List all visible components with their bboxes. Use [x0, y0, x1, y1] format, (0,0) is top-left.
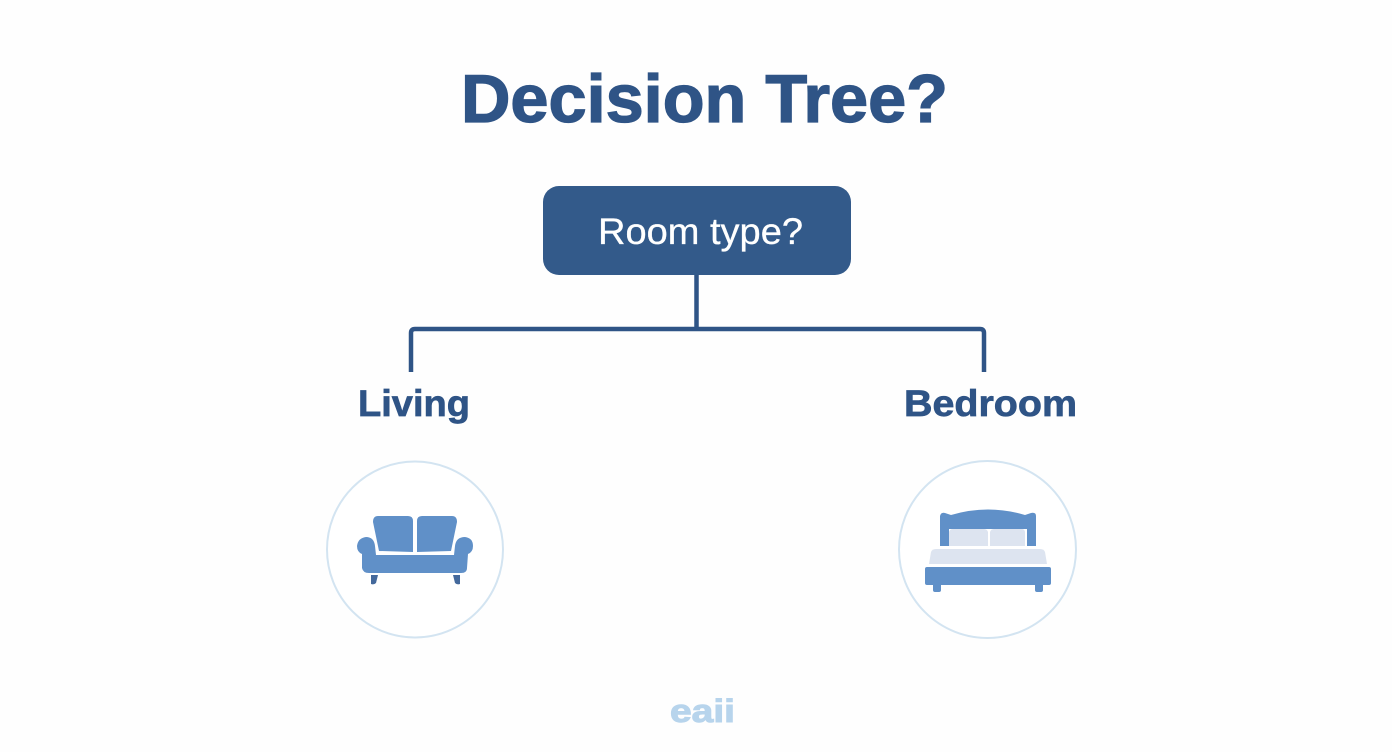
mattress	[929, 549, 1047, 564]
bed frame	[925, 567, 1051, 585]
icon: sofa in circle	[327, 462, 503, 638]
watermark logo: eaii: eaii	[670, 693, 735, 729]
title: Decision Tree?	[461, 61, 948, 137]
sofa body and arms	[357, 537, 473, 573]
headboard	[940, 510, 1036, 546]
root decision node: Room type?: Room type?	[598, 211, 803, 252]
pillows	[949, 529, 988, 546]
branch label: Living: Living	[358, 383, 470, 424]
tree connector lines	[411, 275, 984, 372]
branch label: Bedroom: Bedroom	[904, 383, 1077, 424]
icon: bed in circle	[899, 461, 1076, 638]
bed feet	[933, 585, 941, 592]
root decision node: Room type?	[543, 186, 851, 275]
sofa right cushion	[417, 516, 457, 552]
sofa left cushion	[373, 516, 413, 552]
sofa legs	[371, 575, 378, 584]
